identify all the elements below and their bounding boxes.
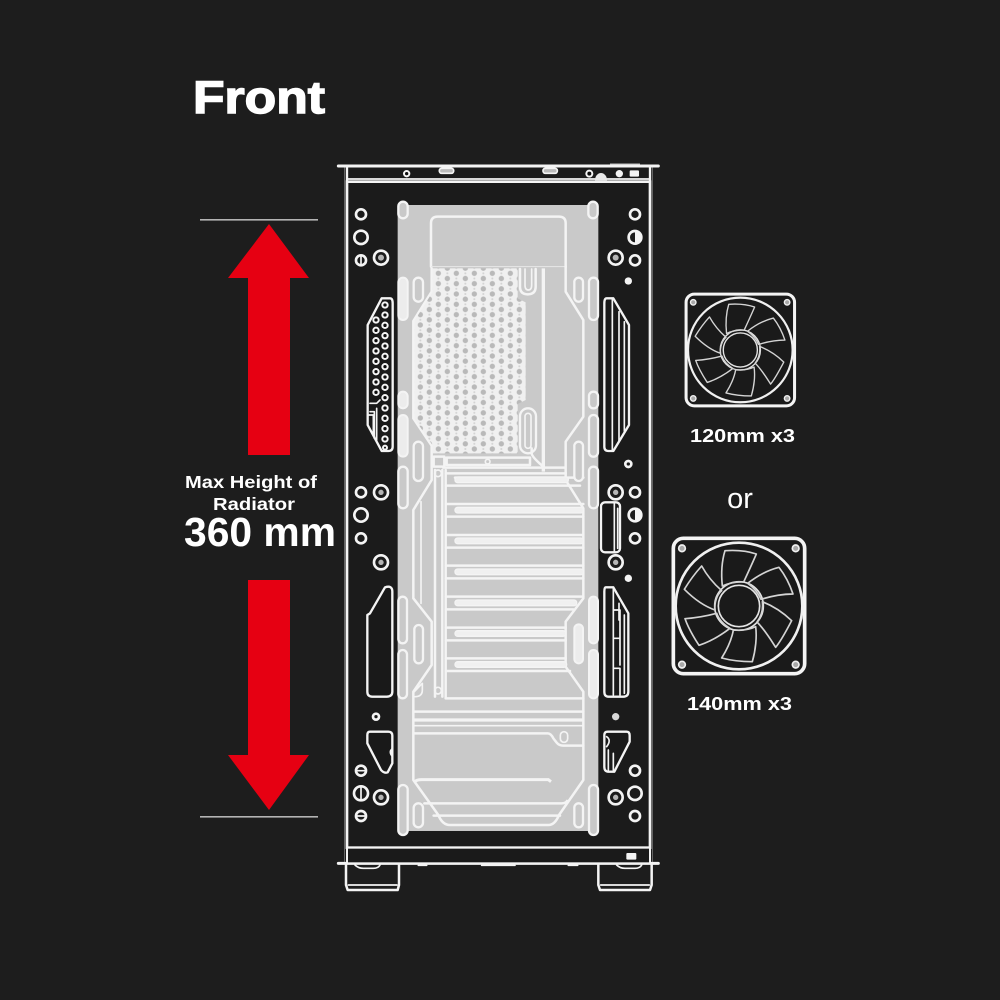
bottom measurement line xyxy=(200,816,318,818)
lower left triangle opening xyxy=(367,732,392,773)
label: max height of radiator xyxy=(184,472,336,555)
top measurement line xyxy=(200,219,318,221)
label: max height of radiator: Radiator xyxy=(213,494,295,514)
tray slots xyxy=(398,202,598,835)
arrow: up xyxy=(228,224,309,455)
left side perforated vent xyxy=(368,298,393,451)
right bracket opening xyxy=(601,502,620,552)
label: max height of radiator: Max Height of xyxy=(185,472,317,492)
lower tray lines xyxy=(414,712,583,816)
grey tray panel xyxy=(398,205,598,831)
mounting holes left xyxy=(354,209,388,821)
lower left side opening xyxy=(367,587,392,697)
expansion slots xyxy=(446,473,583,671)
cable routing cutouts xyxy=(414,268,583,698)
label: 140mm x3: 140mm x3 xyxy=(687,694,792,714)
perforated mesh xyxy=(414,268,526,453)
arrow: down xyxy=(228,580,309,810)
label: 120mm x3: 120mm x3 xyxy=(690,426,795,446)
lower right triangle opening xyxy=(604,732,630,772)
top panel ports xyxy=(404,168,639,860)
mounting holes right xyxy=(609,209,642,821)
case frame xyxy=(338,164,658,863)
label: or: or xyxy=(727,483,753,515)
right side vent xyxy=(604,298,629,451)
lower right side opening xyxy=(604,587,628,697)
title: Front: Front xyxy=(193,72,325,123)
label: max height of radiator: 360 mm xyxy=(184,509,336,555)
case feet xyxy=(346,865,652,890)
diagram: PC case front view xyxy=(338,164,658,890)
icon: 120mm fan xyxy=(686,294,795,406)
icon: 140mm fan xyxy=(673,538,805,674)
